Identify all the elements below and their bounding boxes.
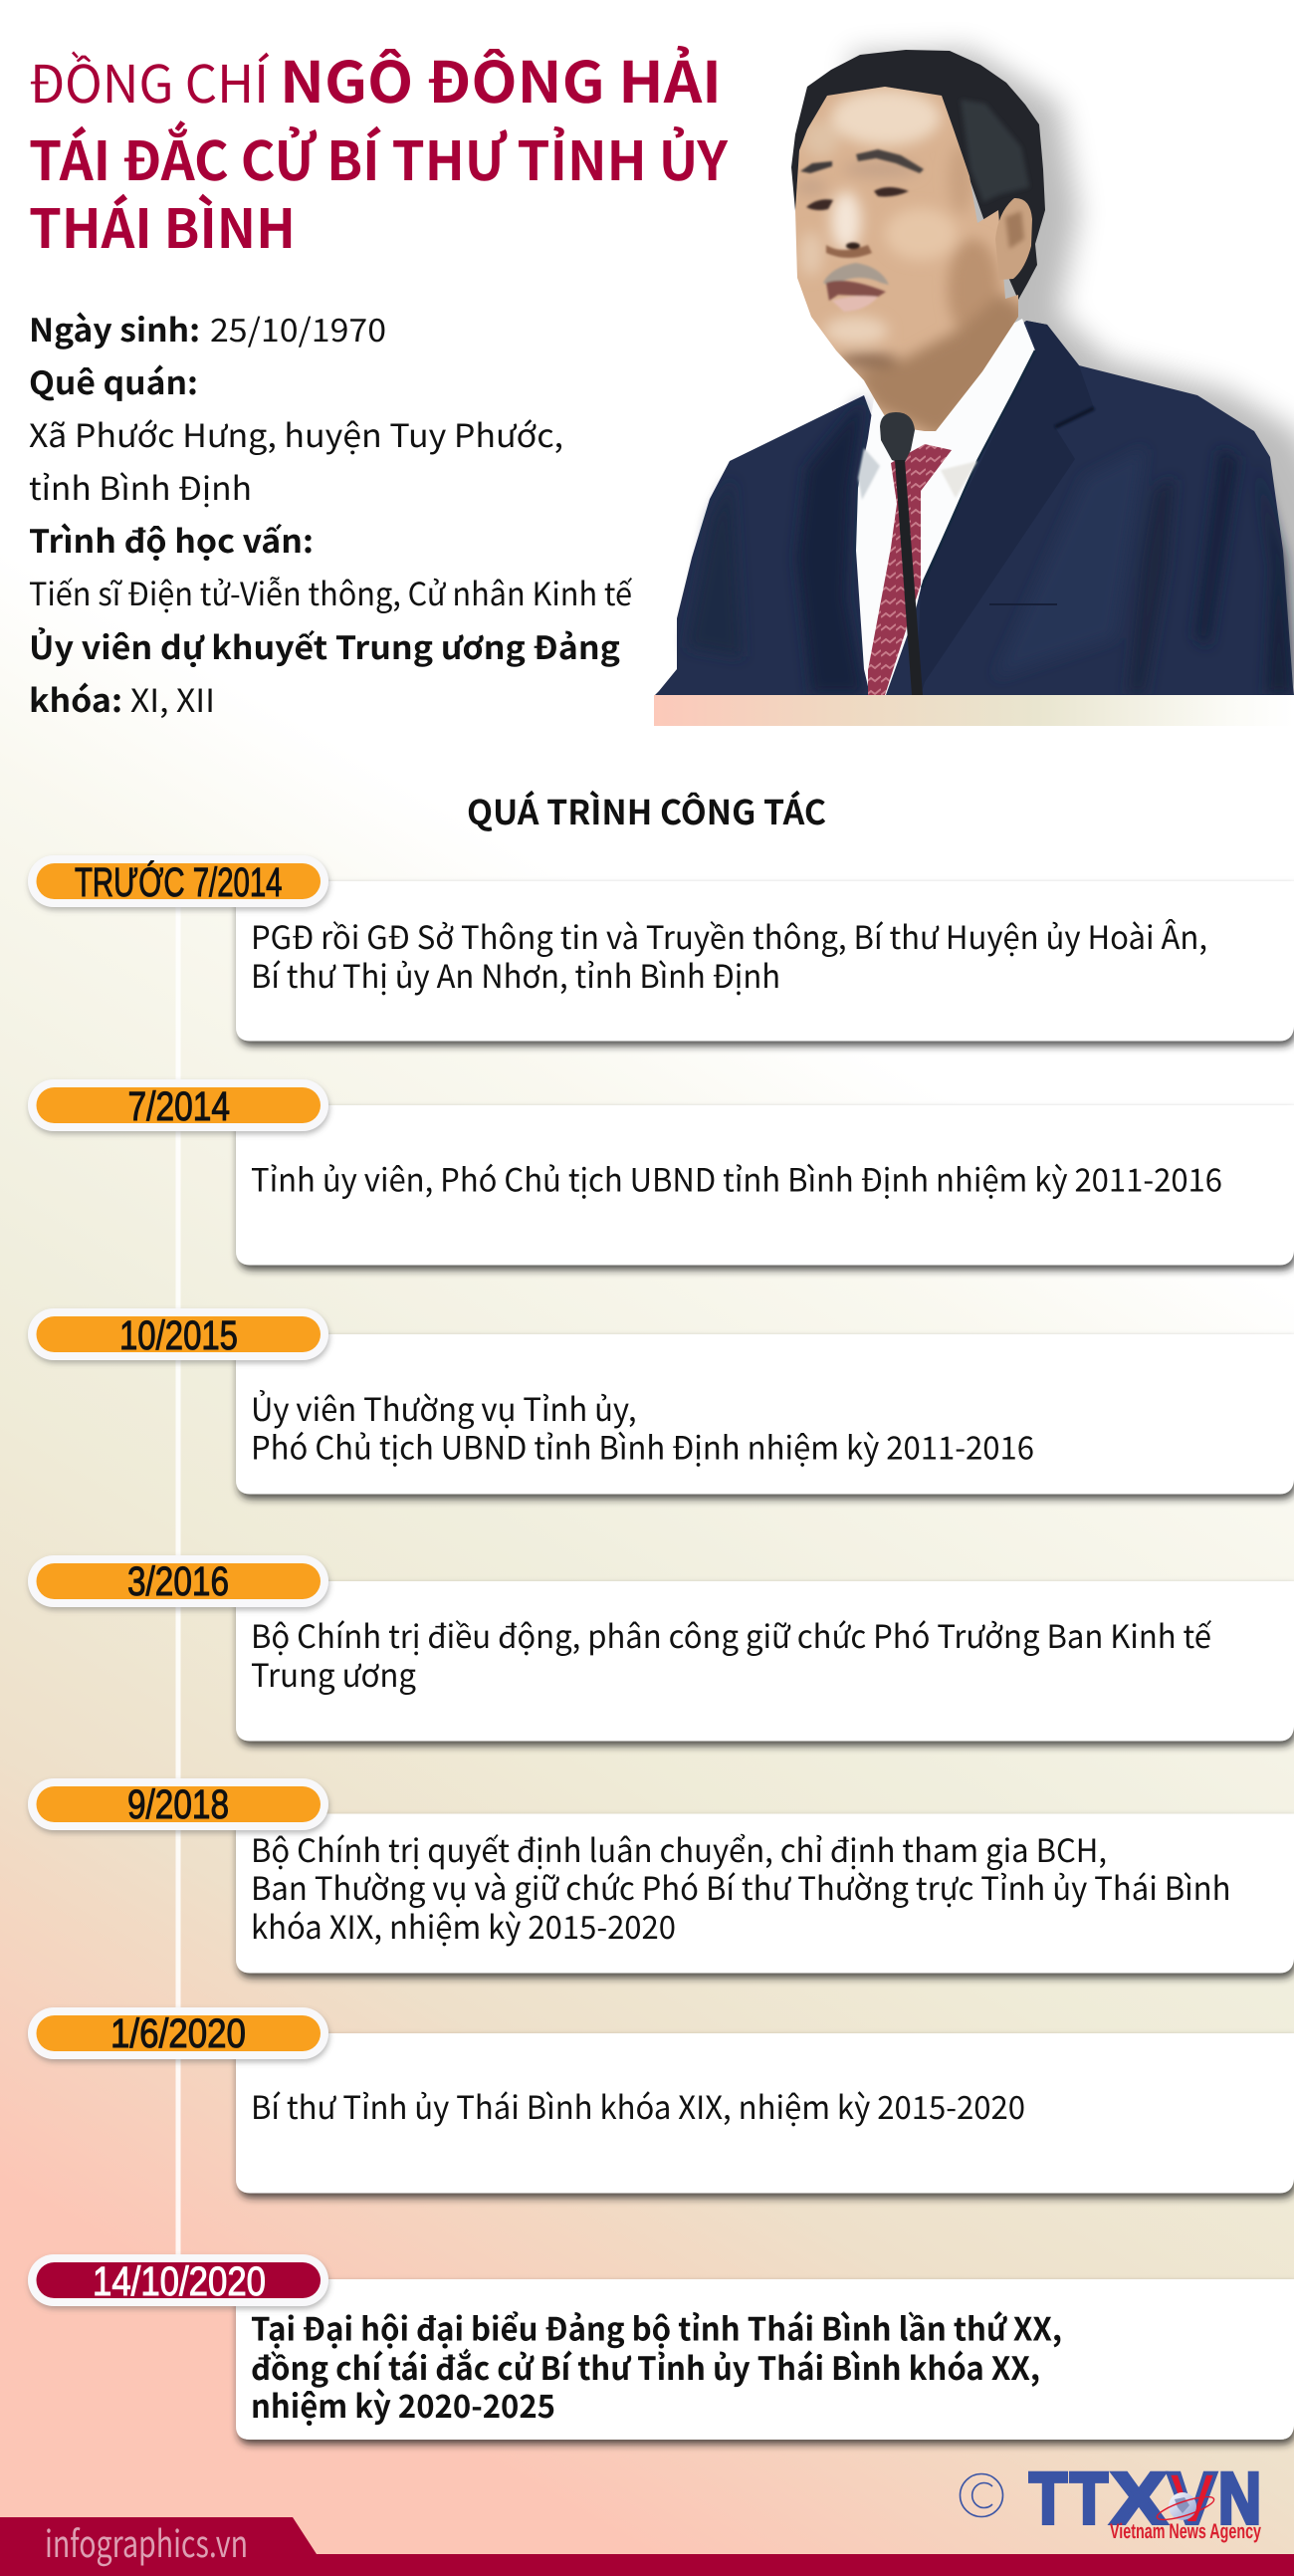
suit <box>655 321 1294 695</box>
skin shading <box>795 90 1025 438</box>
logo: TTXVN: V <box>1168 2459 1216 2539</box>
footer site name: infographics.vn <box>45 2514 248 2568</box>
personal details text block: Ngày sinh: <box>29 306 200 351</box>
card: trước 7/2014: PGĐ rồi GĐ Sở Thông tin và Truyền thông, Bí thư Huyện ủy Hoài Ân, <box>251 913 1207 959</box>
card: 14/10/2020: nhiệm kỳ 2020-2025 <box>251 2382 555 2428</box>
pill: 9/2018 <box>28 1778 328 1830</box>
pill: 14/10/2020 <box>28 2254 328 2306</box>
logo: TTXVN: N <box>1218 2459 1261 2539</box>
card: trước 7/2014 <box>236 881 1294 1042</box>
personal details text block: khóa: <box>29 676 122 722</box>
suit shading <box>687 398 1292 694</box>
personal details text block: Ủy viên dự khuyết Trung ương Đảng <box>29 623 620 669</box>
icon: copyright <box>960 2473 1003 2517</box>
section heading: QUÁ TRÌNH CÔNG TÁC <box>467 786 826 834</box>
card: 3/2016 <box>236 1581 1294 1741</box>
title: THÁI BÌNH <box>29 185 296 264</box>
ear <box>995 198 1032 280</box>
logo: TTXVN: T <box>1070 2459 1108 2539</box>
strip under portrait <box>654 695 1294 726</box>
card: 9/2018: Bộ Chính trị quyết định luân chuyển, chỉ định tham gia BCH, <box>251 1826 1107 1872</box>
card: 9/2018 <box>236 1814 1294 1974</box>
personal details text block: Quê quán: <box>29 358 198 404</box>
pill: 3/2016 <box>28 1555 328 1607</box>
pill: trước 7/2014: TRƯỚC 7/2014 <box>75 859 283 905</box>
logo: TTXVN: T <box>1029 2459 1067 2539</box>
pill: 1/6/2020: 1/6/2020 <box>110 2010 246 2056</box>
personal details text block: tỉnh Bình Định <box>29 464 252 510</box>
personal details text block: Trình độ học vấn: <box>29 517 314 563</box>
shirt <box>856 319 1035 695</box>
personal details text block: Tiến sĩ Điện tử-Viễn thông, Cử nhân Kinh tế <box>29 570 632 615</box>
hair <box>791 50 1045 300</box>
right lapel <box>917 321 1094 695</box>
card: 1/6/2020: Bí thư Tỉnh ủy Thái Bình khóa XIX, nhiệm kỳ 2015-2020 <box>251 2083 1025 2129</box>
personal details text block <box>29 306 632 722</box>
portrait of Ngô Đông Hải <box>655 49 1294 695</box>
personal details text block: XI, XII <box>130 676 215 722</box>
pill: trước 7/2014 <box>28 855 328 907</box>
logo: TTXVN: X <box>1111 2459 1167 2539</box>
pill: 7/2014: 7/2014 <box>127 1083 230 1129</box>
face and neck skin <box>795 87 1018 431</box>
card: 10/2015: Ủy viên Thường vụ Tỉnh ủy, <box>251 1385 637 1431</box>
card: 10/2015: Phó Chủ tịch UBND tỉnh Bình Định nhiệm kỳ 2011-2016 <box>251 1424 1034 1470</box>
title: TÁI ĐẮC CỬ BÍ THƯ TỈNH ỦY <box>29 117 729 196</box>
card: 3/2016: Trung ương <box>251 1651 416 1697</box>
pill: 10/2015 <box>28 1308 328 1360</box>
card: 3/2016: Bộ Chính trị điều động, phân công giữ chức Phó Trưởng Ban Kinh tế <box>251 1612 1211 1658</box>
facial features <box>800 149 924 312</box>
timeline line <box>175 896 181 2270</box>
title: NGÔ ĐÔNG HẢI <box>280 38 722 119</box>
title: ĐỒNG CHÍ <box>29 43 270 117</box>
pill: 9/2018: 9/2018 <box>127 1781 229 1827</box>
pill: 7/2014 <box>28 1079 328 1131</box>
card: trước 7/2014: Bí thư Thị ủy An Nhơn, tỉnh Bình Định <box>251 952 780 998</box>
title <box>29 38 729 264</box>
card: 7/2014: Tỉnh ủy viên, Phó Chủ tịch UBND tỉnh Bình Định nhiệm kỳ 2011-2016 <box>251 1155 1222 1201</box>
personal details text block: Xã Phước Hưng, huyện Tuy Phước, <box>29 411 563 457</box>
pill: 10/2015: 10/2015 <box>119 1312 238 1358</box>
card: 14/10/2020 <box>236 2279 1294 2440</box>
card: 1/6/2020 <box>236 2033 1294 2193</box>
pill: 3/2016: 3/2016 <box>127 1558 229 1604</box>
personal details text block: 25/10/1970 <box>210 306 386 351</box>
portrait shadow <box>850 49 1294 681</box>
microphone <box>880 412 923 695</box>
card: 14/10/2020: đồng chí tái đắc cử Bí thư Tỉnh ủy Thái Bình khóa XX, <box>251 2344 1040 2390</box>
necktie <box>868 444 952 695</box>
card: 7/2014 <box>236 1105 1294 1265</box>
logo: TTXVN <box>1029 2459 1261 2543</box>
pill: 14/10/2020: 14/10/2020 <box>93 2258 266 2304</box>
card: 9/2018: khóa XIX, nhiệm kỳ 2015-2020 <box>251 1903 676 1949</box>
card: 14/10/2020: Tại Đại hội đại biểu Đảng bộ tỉnh Thái Bình lần thứ XX, <box>251 2304 1062 2350</box>
pill: 1/6/2020 <box>28 2007 328 2059</box>
card: 10/2015 <box>236 1334 1294 1494</box>
footer bar <box>0 2517 1294 2576</box>
card: 9/2018: Ban Thường vụ và giữ chức Phó Bí thư Thường trực Tỉnh ủy Thái Bình <box>251 1864 1230 1910</box>
